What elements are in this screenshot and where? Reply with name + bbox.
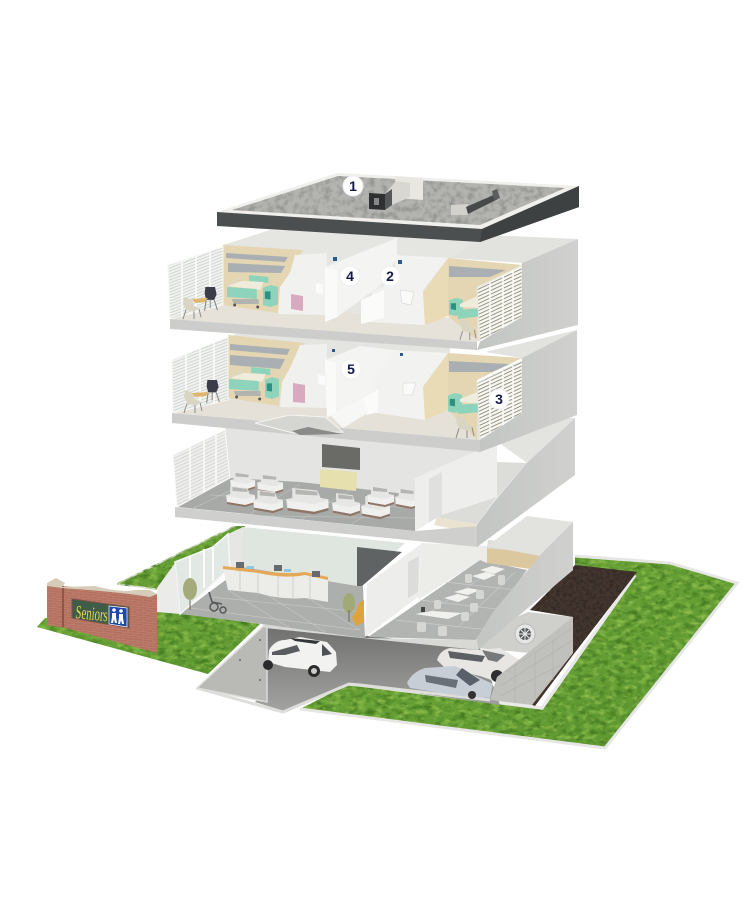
left louvers bbox=[172, 337, 228, 413]
cabinet counter bbox=[487, 540, 545, 569]
marker 2: 2 bbox=[386, 268, 394, 284]
third level: lounge floor group bbox=[173, 417, 575, 547]
left louvers bbox=[168, 247, 223, 319]
rooftop air handler bbox=[369, 176, 423, 210]
second level back wall bbox=[228, 322, 450, 420]
ramp road and parking bbox=[197, 625, 500, 712]
left bathroom bbox=[278, 253, 327, 315]
ground floor: tiled lobby floor bbox=[180, 567, 365, 638]
marker 5: 5 bbox=[347, 361, 355, 377]
second level floor bbox=[173, 400, 522, 440]
marker 3: 3 bbox=[495, 391, 503, 407]
left beige wall bbox=[228, 335, 305, 406]
ramp concrete wall bbox=[197, 623, 267, 702]
ground floor right wall bbox=[477, 516, 573, 650]
lounge back wall bbox=[225, 428, 497, 497]
roof slab bbox=[217, 173, 579, 242]
sign icon: seniors pictogram bbox=[109, 606, 127, 627]
first floor of rooms: top level group bbox=[168, 230, 578, 350]
marker 4 bbox=[340, 266, 360, 286]
top level back wall bbox=[223, 230, 487, 320]
cafe wing: back wall bbox=[418, 543, 487, 600]
entrance sign bbox=[47, 578, 157, 653]
lounge partition wall bbox=[415, 442, 497, 531]
marker 1 bbox=[343, 176, 363, 196]
second level: rooms floor group bbox=[172, 322, 577, 452]
roof fascia bbox=[217, 186, 579, 242]
lounge louvers bbox=[173, 430, 230, 507]
wheelchair bbox=[209, 592, 226, 613]
balcony floor bbox=[437, 462, 527, 525]
plant and orange sofa bbox=[343, 593, 364, 626]
soil bed bbox=[530, 565, 637, 706]
stairwell opening bbox=[255, 415, 343, 433]
third level right wall bbox=[498, 417, 575, 463]
car: white hatchback bbox=[263, 637, 337, 677]
right beige wall stub bbox=[423, 353, 448, 420]
left cabinet bbox=[265, 377, 279, 399]
car: rear white suv bbox=[437, 648, 520, 682]
roof rim bbox=[217, 173, 579, 229]
third level slab bbox=[175, 507, 478, 547]
top level floor bbox=[170, 305, 522, 342]
right bathroom bbox=[370, 350, 448, 420]
partition wall bbox=[365, 543, 422, 637]
right room beige wall bbox=[448, 353, 522, 440]
lounge tiled floor bbox=[178, 478, 415, 531]
left chair bbox=[207, 380, 219, 403]
left bathroom bbox=[280, 344, 327, 408]
right louvers bbox=[477, 361, 522, 440]
lounge armchairs and sofa bbox=[230, 472, 255, 491]
ventilation fan bbox=[515, 624, 535, 644]
right bed and cabinet bbox=[448, 393, 462, 413]
low stub wall bbox=[361, 290, 384, 324]
ground floor: back wall bbox=[243, 527, 405, 586]
right bathroom bbox=[370, 255, 448, 325]
lobby side walls and glazing bbox=[157, 527, 243, 614]
marker 1: 1 bbox=[349, 178, 357, 194]
rear concrete wall bbox=[477, 612, 573, 653]
rooftop duct bbox=[451, 189, 500, 215]
marker 5 bbox=[341, 359, 361, 379]
plant: lobby bbox=[183, 578, 197, 610]
dark grey wall panel bbox=[357, 547, 402, 586]
marker 2 bbox=[380, 266, 400, 286]
right bed and cabinet bbox=[449, 298, 463, 316]
reception desk bbox=[223, 562, 328, 602]
cafe tables and chairs bbox=[415, 566, 505, 636]
top level slab bbox=[170, 319, 477, 350]
cream sideboard bbox=[320, 469, 357, 491]
corridor wall bbox=[325, 346, 393, 417]
right beige wall stub bbox=[423, 258, 448, 325]
right louvers bbox=[477, 265, 522, 342]
tv screen bbox=[322, 444, 360, 470]
sign text: Seniors: Seniors bbox=[74, 602, 109, 626]
right chair bbox=[456, 415, 474, 438]
marker 4: 4 bbox=[346, 268, 354, 284]
lawn: right and front bbox=[300, 556, 737, 748]
left bed bbox=[227, 275, 268, 308]
marker 3 bbox=[489, 389, 509, 409]
cafe wing: floor bbox=[368, 560, 527, 640]
left beige wall bbox=[223, 245, 303, 313]
top level right wall bbox=[450, 235, 578, 263]
second level right wall bbox=[485, 330, 577, 358]
car: front silver sedan bbox=[407, 666, 493, 699]
low stub wall bbox=[363, 390, 378, 415]
lawn: back left strip bbox=[117, 526, 245, 590]
left cabinet bbox=[263, 285, 278, 307]
right chair bbox=[460, 318, 476, 340]
left bed bbox=[229, 367, 270, 400]
second level slab bbox=[172, 413, 480, 452]
ground floor: slab under lobby bbox=[262, 624, 478, 650]
corridor wall bbox=[325, 238, 397, 317]
corridor floor bbox=[330, 398, 368, 428]
roof deck gravel bbox=[232, 176, 565, 225]
lawn: front left bbox=[37, 610, 260, 674]
concrete retaining wall bbox=[490, 617, 573, 705]
left chair bbox=[205, 287, 217, 311]
right room beige wall bbox=[448, 258, 522, 340]
